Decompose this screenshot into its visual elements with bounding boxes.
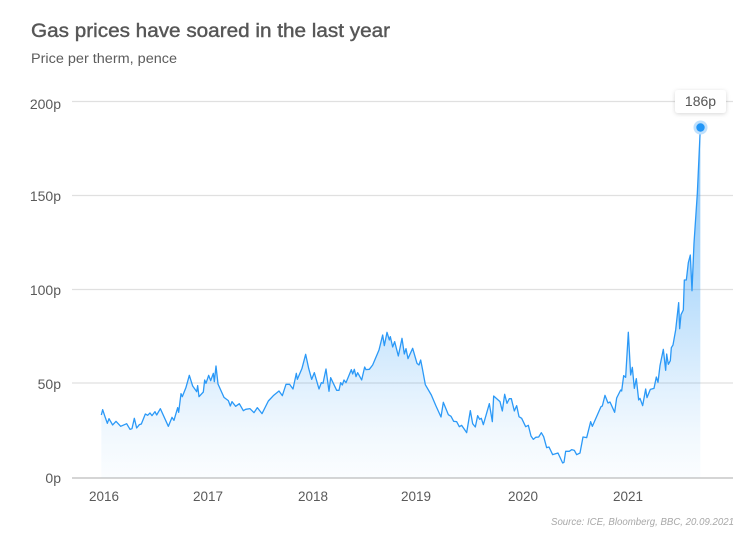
y axis labels: 100p [30,282,61,298]
line chart: gas price [101,128,700,478]
title: Gas prices have soared in the last year [31,21,391,42]
x axis labels: 2017 [193,489,223,504]
x axis labels: 2020 [508,489,538,504]
y axis labels [30,96,61,486]
y axis labels: 200p [30,96,61,112]
callout: 186p: 186p [685,93,716,109]
grid lines [72,102,733,478]
x axis labels: 2019 [401,489,431,504]
y axis labels: 50p [38,376,61,392]
peak marker [694,120,708,134]
x axis labels [89,489,643,504]
x axis labels: 2021 [613,489,643,504]
x axis labels: 2018 [298,489,328,504]
subtitle: Price per therm, pence [31,51,177,66]
source: Source: ICE, Bloomberg, BBC, 20.09.2021 [551,517,734,528]
callout: 186p [675,90,726,113]
y axis labels: 150p [30,188,61,204]
x axis labels: 2016 [89,489,119,504]
area fill [101,128,700,478]
price line [101,128,700,463]
y axis labels: 0p [45,470,61,486]
